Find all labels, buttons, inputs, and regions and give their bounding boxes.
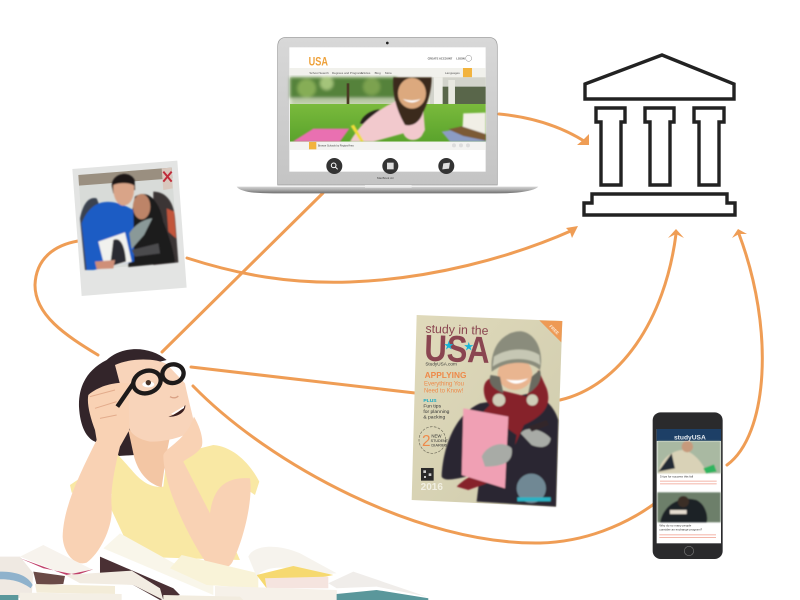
site navigation: School Search [309, 71, 329, 75]
browse schools bar: Browse Schools by Region/Area [318, 145, 354, 148]
polaroid frame [72, 161, 187, 296]
eye, nose and mouth [142, 380, 185, 417]
site navigation: Degrees and Programs [332, 71, 363, 75]
school icon [382, 158, 398, 174]
building column left [596, 108, 625, 185]
article two text [659, 524, 716, 538]
site navigation [289, 68, 486, 77]
arrow: student to laptop [162, 193, 323, 352]
arrow: photo to institution [187, 226, 578, 282]
arrow: laptop to institution [499, 114, 589, 145]
headline: applying: APPLYING [425, 370, 466, 380]
building base [584, 194, 735, 215]
site navigation: Languages [445, 71, 460, 75]
laptop lid [278, 37, 497, 185]
face [115, 359, 195, 442]
raised arm [63, 383, 129, 563]
plus feature: for planning [423, 409, 450, 415]
site navigation: Articles [361, 71, 371, 75]
QR code [421, 468, 434, 481]
badge: new student diaries: STUDENT [431, 439, 449, 443]
open book left [20, 545, 93, 575]
plus feature: & packing [423, 415, 445, 421]
free corner ribbon: FREE [548, 324, 560, 336]
camera [386, 42, 389, 44]
arrow: student to photo [35, 241, 98, 355]
search icon [326, 158, 342, 174]
magazine cover [412, 315, 562, 507]
home button [684, 546, 694, 556]
phone body [653, 412, 723, 559]
article two text: consider an exchange program? [659, 527, 702, 531]
website screen [289, 47, 486, 174]
article photo two [657, 492, 721, 522]
student looking up [0, 349, 428, 600]
t-shirt [70, 445, 259, 560]
smartphone with app [653, 412, 723, 559]
badge: new student diaries: NEW [431, 433, 442, 438]
article photo one [657, 441, 721, 473]
cover background [412, 315, 562, 507]
badge: new student diaries [419, 427, 449, 453]
open book centre [100, 557, 180, 600]
book icon [438, 158, 454, 174]
headline: everything you need to know: Need to Know! [424, 389, 464, 395]
badge: new student diaries: 2 [422, 433, 431, 450]
magazine model [442, 331, 558, 507]
neck [128, 430, 170, 487]
account links: CREATE ACCOUNT [428, 57, 453, 61]
finger lines [90, 390, 117, 418]
arrow: student to phone [193, 386, 654, 543]
arrow: magazine to institution [560, 229, 684, 400]
arrow: phone to institution [727, 229, 762, 465]
plus feature: Fun tips [423, 403, 442, 409]
icon: institution building [584, 55, 735, 215]
masthead: USA: USA [424, 327, 490, 371]
stack of open books [0, 533, 428, 600]
hero photo: student on grass [290, 77, 486, 142]
free corner ribbon [539, 320, 562, 342]
website screen: LOGIN [456, 57, 465, 61]
bezel label: MacBook Air [377, 176, 394, 180]
left book stack [0, 557, 33, 600]
issue year: 2016 [421, 482, 443, 493]
app screen [657, 429, 721, 543]
site navigation: More [385, 71, 392, 75]
headline: everything you need to know: Everything You [424, 381, 464, 387]
photo [78, 168, 178, 270]
open book right [248, 547, 337, 577]
polaroid photo of students [72, 161, 187, 296]
app header: studyUSA [674, 434, 706, 441]
website line: StudyUSA.com [425, 361, 457, 366]
laptop base [237, 187, 538, 193]
masthead: USA: ★ [443, 338, 454, 352]
badge: new student diaries: DIARIES [431, 443, 448, 448]
plus feature: PLUS [423, 398, 437, 404]
masthead: study in the: study in the [425, 322, 489, 338]
site logo: USA [309, 54, 328, 68]
glasses [117, 363, 185, 407]
article two text: Why do so many people [659, 524, 692, 528]
masthead: USA: ★ [463, 340, 474, 354]
hair [79, 349, 167, 456]
site navigation: Blog [375, 71, 381, 75]
building roof [585, 55, 734, 99]
arrow: student to magazine [191, 367, 415, 393]
browse schools bar [290, 142, 486, 150]
building column centre [645, 108, 674, 185]
article one text: 5 tips for success this fall [660, 475, 694, 479]
chin-resting arm [163, 417, 251, 569]
laptop showing website [237, 37, 538, 193]
building column right [694, 108, 724, 185]
